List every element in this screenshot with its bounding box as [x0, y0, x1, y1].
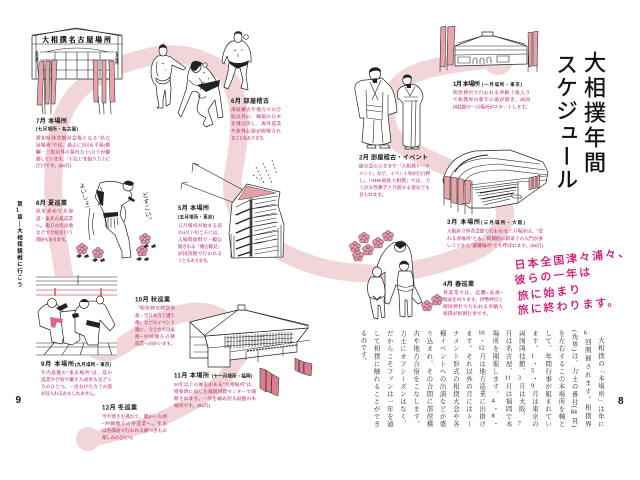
- heading: October: 10月 秋巡業: [135, 296, 171, 304]
- heading: April: 関東を回ります。伊勢神宮と: [443, 296, 503, 303]
- illustration: Kyushu basho venue: [190, 305, 312, 396]
- heading: February: メント」など、イベント事が目白押: [359, 170, 430, 177]
- body text: vertical columns: 6 回開催されます。相撲界: [584, 330, 591, 427]
- heading: October: 権」などのイベント: [135, 319, 175, 326]
- heading: June: 6月 部屋稽古: [231, 97, 269, 105]
- heading: September: [41, 360, 112, 397]
- body text: vertical columns: 10 ・ 12 月は地方巡業に出掛け: [478, 330, 485, 427]
- heading: September: 9月 本場所: [41, 360, 75, 368]
- heading: May: 5月 本場所: [178, 204, 210, 212]
- heading: November: (十一月場所・福岡): [212, 372, 252, 379]
- pink handwritten tagline: 旅に始まり: [517, 281, 583, 304]
- heading: May: 開される「稽古総見」: [178, 243, 222, 250]
- heading: December: 雪や寒さを逃れて、暖かい九州: [102, 413, 167, 420]
- heading: February: 士が女性歌手と共演する姿なども: [359, 184, 430, 191]
- chapter label vertical: 第 1 章―大相撲観戦に行こう: [16, 201, 22, 287]
- illustration: wrestlers in the ring: [36, 275, 117, 356]
- heading: October: 祝・全日本力士選士: [135, 312, 175, 319]
- heading: April: 靖国神社で行われる奉納大: [443, 303, 503, 310]
- heading: July: (七月場所・名古屋): [36, 126, 78, 132]
- heading: April: 相撲が恒例行事です。: [443, 310, 491, 317]
- body text: vertical columns: ます。 1 ・ 5 ・ 9 月は東京の: [531, 330, 538, 427]
- heading: June: 宿以外に、極端の日本: [231, 113, 281, 120]
- heading: May: の4月下旬ごろには、: [178, 229, 222, 236]
- heading: July: 注目です。(84頁): [36, 162, 71, 169]
- heading: March: いことから"就職場所"とも呼ばれます。(84頁): [447, 242, 543, 249]
- heading: July: 勝しています。"下克上"を狙う力士に: [36, 156, 110, 162]
- heading: February: 見られます。: [359, 191, 386, 198]
- heading: August: 道・東北の夏巡業: [36, 215, 73, 222]
- heading: June: ることもあります。: [231, 134, 267, 141]
- heading: February: [359, 154, 430, 198]
- heading: August: 部屋もあります。: [36, 236, 69, 243]
- heading: November: 催されます。一年を締め括る最後の本: [174, 395, 256, 402]
- illustration: stable building with poles: [181, 160, 284, 258]
- body text: vertical columns: して、年間行事が組まれてい: [544, 330, 551, 427]
- heading: July: 7月 本場所: [36, 117, 68, 125]
- illustration: wrestler with two children and cherry blossoms: [368, 241, 422, 319]
- body text: vertical columns: 古や地方合宿をこなします。: [412, 330, 419, 427]
- heading: January: (一月場所・東京): [482, 81, 522, 88]
- illustration: wrestler lifting with flowers: よいしょ!: [77, 182, 90, 209]
- heading: December: ~沖縄地方の冬巡業へ。年末: [102, 420, 167, 427]
- illustration: wrestler lifting with flowers: どすこい。: [140, 191, 152, 224]
- heading: September: 巡業や合宿で鍛えた成果も見どこ: [41, 376, 112, 383]
- body text: vertical columns: 場所を開催します。 4 ・ 8 ・: [491, 330, 498, 427]
- heading: September: 年内最後の"東京場所"は、夏の: [41, 369, 112, 376]
- heading: March: (三月場所・大阪): [481, 219, 525, 226]
- heading: May: が国技館で行われる: [178, 250, 222, 257]
- heading: June: 部屋稽古や地方での合: [231, 106, 281, 113]
- heading: September: が見られるかもしれません。: [41, 390, 98, 397]
- heading: November: 11月 本場所: [174, 371, 210, 379]
- heading: October: 巡業へ向かいます。: [135, 340, 175, 347]
- heading: January: [453, 80, 530, 111]
- illustration: Ryogoku venue with banners: [440, 26, 538, 72]
- heading: July: 屋場所"では、過去に5回も平幕(横: [36, 142, 110, 148]
- title line 2: スケジュール: [553, 53, 578, 191]
- heading: December: [102, 404, 167, 441]
- heading: May: 入場料無料で一般公: [178, 236, 222, 243]
- heading: September: ろのひとつ。一皮むけた力士の姿: [41, 383, 112, 390]
- illustration: wrestler lifting with flowers: [77, 181, 152, 258]
- illustration: sumo wrestler standing, arm out: [151, 43, 186, 108]
- pink handwritten tagline: [514, 244, 632, 318]
- heading: October: 「明治神宮例祭奉: [135, 304, 175, 311]
- body text: vertical columns: 種イベントへの出演などが盛: [439, 330, 446, 427]
- body text: vertical columns: を左右するこの本場所を軸と: [557, 330, 564, 427]
- heading: April: 4月 春巡業: [443, 280, 475, 288]
- heading: October: 後に、力士たちは東: [135, 326, 175, 333]
- heading: April: 春巡業では、近畿~東海~: [443, 289, 504, 296]
- page number 8: 8: [618, 396, 624, 407]
- heading: October: [135, 296, 175, 347]
- illustration: Nagoya basho venue with banners: [32, 28, 122, 114]
- heading: August: などで合宿を行う: [36, 229, 73, 236]
- icon: cherry blossoms: [350, 230, 442, 311]
- heading: November: 50年以上の歴史がある"九州場所"は、: [174, 381, 256, 388]
- heading: July: 愛知県体育館が会場となる"名古: [36, 134, 110, 142]
- heading: November: 博多湾に面した福岡国際センターで開: [174, 388, 256, 395]
- heading: December: 楽しみのひとつ。: [102, 434, 136, 441]
- heading: August: へ。親方の出身地: [36, 222, 73, 229]
- illustration: Nagoya basho venue with banners: 大相撲名古屋場所: [42, 35, 111, 44]
- illustration: two wrestlers grappling: [178, 61, 223, 127]
- pink handwritten tagline: 旅に終わります。: [517, 293, 621, 318]
- heading: May: 五月場所が始まる前: [178, 222, 222, 229]
- heading: March: [447, 218, 543, 249]
- title line 1: 大相撲年間: [581, 51, 606, 176]
- heading: May: こともあります。: [178, 257, 211, 264]
- body text: vertical columns: 月は名古屋、 11 月は福岡で本: [505, 330, 512, 427]
- illustration: Nagoya basho venue with banners: 名古屋: [34, 50, 38, 62]
- heading: March: 3月 本場所: [447, 218, 481, 226]
- illustration: wrestler and woman in kimono: [355, 67, 423, 149]
- body text: vertical columns: るのです。: [359, 330, 366, 364]
- heading: January: で相撲界の新年の幕が開き、両国: [453, 96, 530, 103]
- icon: flowers beside wrestler: [76, 233, 156, 262]
- heading: October: 海~中国地方の秋: [135, 333, 175, 340]
- illustration: Nagoya basho venue with banners: 七月場所: [114, 50, 118, 65]
- heading: April: [443, 280, 504, 317]
- body text: vertical columns: ます。それ以外の月にはトー: [465, 330, 472, 427]
- heading: February: 2月 部屋稽古・イベント: [359, 154, 428, 162]
- heading: August: 涼を求めて北海: [36, 208, 73, 215]
- heading: December: 12月 冬巡業: [102, 404, 138, 412]
- heading: December: は各部屋で行われる餅つきもお: [102, 427, 167, 434]
- heading: September: (九月場所・東京): [75, 361, 111, 368]
- body text: vertical columns: (角界)は、力士の番付( 84 頁): [571, 330, 578, 427]
- pink handwritten tagline: 日本全国津々浦々、: [514, 244, 632, 273]
- heading: August: 8月 夏巡業: [36, 199, 68, 207]
- body text: vertical columns: だからこそファンは一年を通: [386, 330, 393, 427]
- page number 9: 9: [16, 395, 22, 406]
- heading: January: 国技館で一月場所がスタートします。: [453, 104, 530, 111]
- heading: July: [36, 117, 110, 169]
- body text: vertical columns: 両国国技館、 3 月は大阪、 7: [518, 330, 525, 427]
- heading: February: 節分会の豆まきや「大相撲トーナ: [359, 162, 430, 170]
- heading: March: れる春場所"とも。時期的に新弟子の入門が多: [447, 235, 543, 242]
- body text: vertical columns: ナメント形式の相撲大会や各: [452, 330, 459, 427]
- heading: July: 綱・三役以外の幕内力士)力士が優: [36, 148, 110, 156]
- pink route ribbon linking the months: [53, 45, 513, 451]
- pink handwritten tagline: 彼らの一年は: [514, 263, 593, 288]
- heading: June: [231, 97, 281, 141]
- heading: March: 大阪府立体育会館で行われる三月場所は、"荒: [447, 228, 543, 234]
- heading: November: 場所です。(84頁): [174, 402, 210, 409]
- heading: January: 明治神宮で行われる奉納土俵入り: [453, 89, 530, 96]
- heading: May: [178, 204, 222, 264]
- heading: January: 1月 本場所: [453, 80, 481, 88]
- heading: June: や海外公演が開催され: [231, 127, 281, 134]
- heading: June: を飛び出し、海外巡業: [231, 120, 281, 127]
- body text: vertical columns: 力士にオフシーズンはなく、: [399, 330, 406, 427]
- illustration: Osaka arena with banners: [443, 150, 548, 214]
- illustration: sumo wrestler standing in mawashi: [222, 31, 251, 90]
- heading: August: [36, 199, 73, 243]
- heading: February: し。「NHK福祉大相撲」では、力: [359, 177, 430, 184]
- heading: May: (五月場所・東京): [178, 214, 214, 221]
- body text: vertical columns: して相撲に触れることができ: [373, 330, 380, 427]
- body text: vertical columns: 大相撲の「本場所」は年に: [597, 337, 604, 427]
- body text: vertical columns: り込まれ、その合間に部屋稽: [425, 330, 432, 427]
- heading: November: [174, 371, 256, 409]
- body text: vertical columns: [359, 330, 604, 427]
